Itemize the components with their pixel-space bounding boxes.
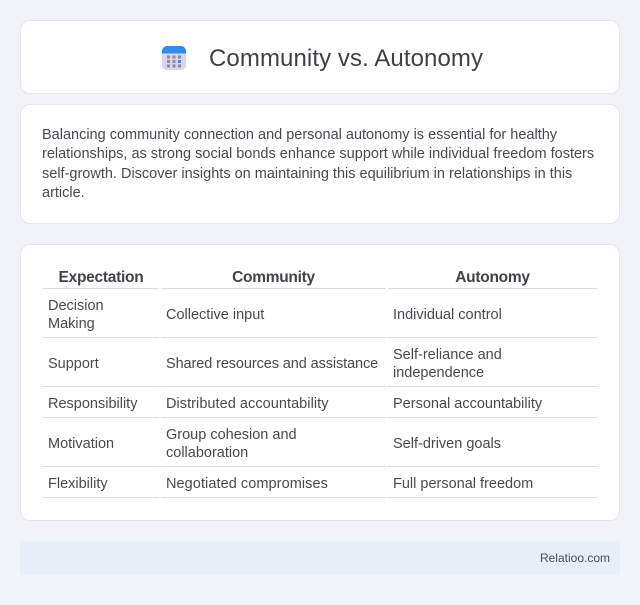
panel: description: [20, 104, 620, 224]
row: flexibility: [43, 476, 597, 498]
panel: title card: [20, 20, 620, 94]
description text: article.: [42, 185, 85, 201]
icon: calendar: [162, 46, 186, 70]
row: support: Self-reliance and: [393, 347, 502, 363]
footer bar: [20, 541, 620, 575]
row: motivation: Group cohesion and: [166, 427, 297, 443]
description text: Balancing community connection and personal autonomy is essential for healthy: [42, 127, 557, 143]
row: responsibility: Personal accountability: [393, 396, 542, 412]
description text: self-growth. Discover insights on maintaining this equilibrium in relationships in this: [42, 166, 572, 182]
row: flexibility: Negotiated compromises: [166, 476, 328, 492]
row: decision making: Collective input: [166, 307, 264, 323]
table header row: Expectation: [59, 269, 143, 286]
row: support: Support: [48, 356, 99, 372]
row: support: [43, 347, 597, 387]
panel: comparison table: [20, 244, 620, 521]
row: motivation: Motivation: [48, 436, 114, 452]
row: responsibility: Distributed accountability: [166, 396, 328, 412]
table header row: [43, 269, 597, 289]
row: decision making: Making: [48, 316, 95, 332]
title: Community vs. Autonomy: [209, 45, 483, 72]
row: support: Shared resources and assistance: [166, 356, 378, 372]
row: decision making: Individual control: [393, 307, 502, 323]
row: support: independence: [393, 365, 484, 381]
row: flexibility: Flexibility: [48, 476, 108, 492]
table header row: Community: [232, 269, 315, 286]
row: responsibility: [43, 396, 597, 418]
footer text: Relatioo.com: [540, 551, 610, 565]
row: decision making: Decision: [48, 298, 104, 314]
row: motivation: collaboration: [166, 445, 248, 461]
description text: [42, 127, 594, 201]
row: decision making: [43, 298, 597, 338]
row: motivation: Self-driven goals: [393, 436, 501, 452]
description text: relationships, as strong social bonds enhance support while individual freedom fosters: [42, 146, 594, 162]
table header row: Autonomy: [455, 269, 530, 286]
row: flexibility: Full personal freedom: [393, 476, 533, 492]
row: responsibility: Responsibility: [48, 396, 137, 412]
row: motivation: [43, 427, 597, 467]
